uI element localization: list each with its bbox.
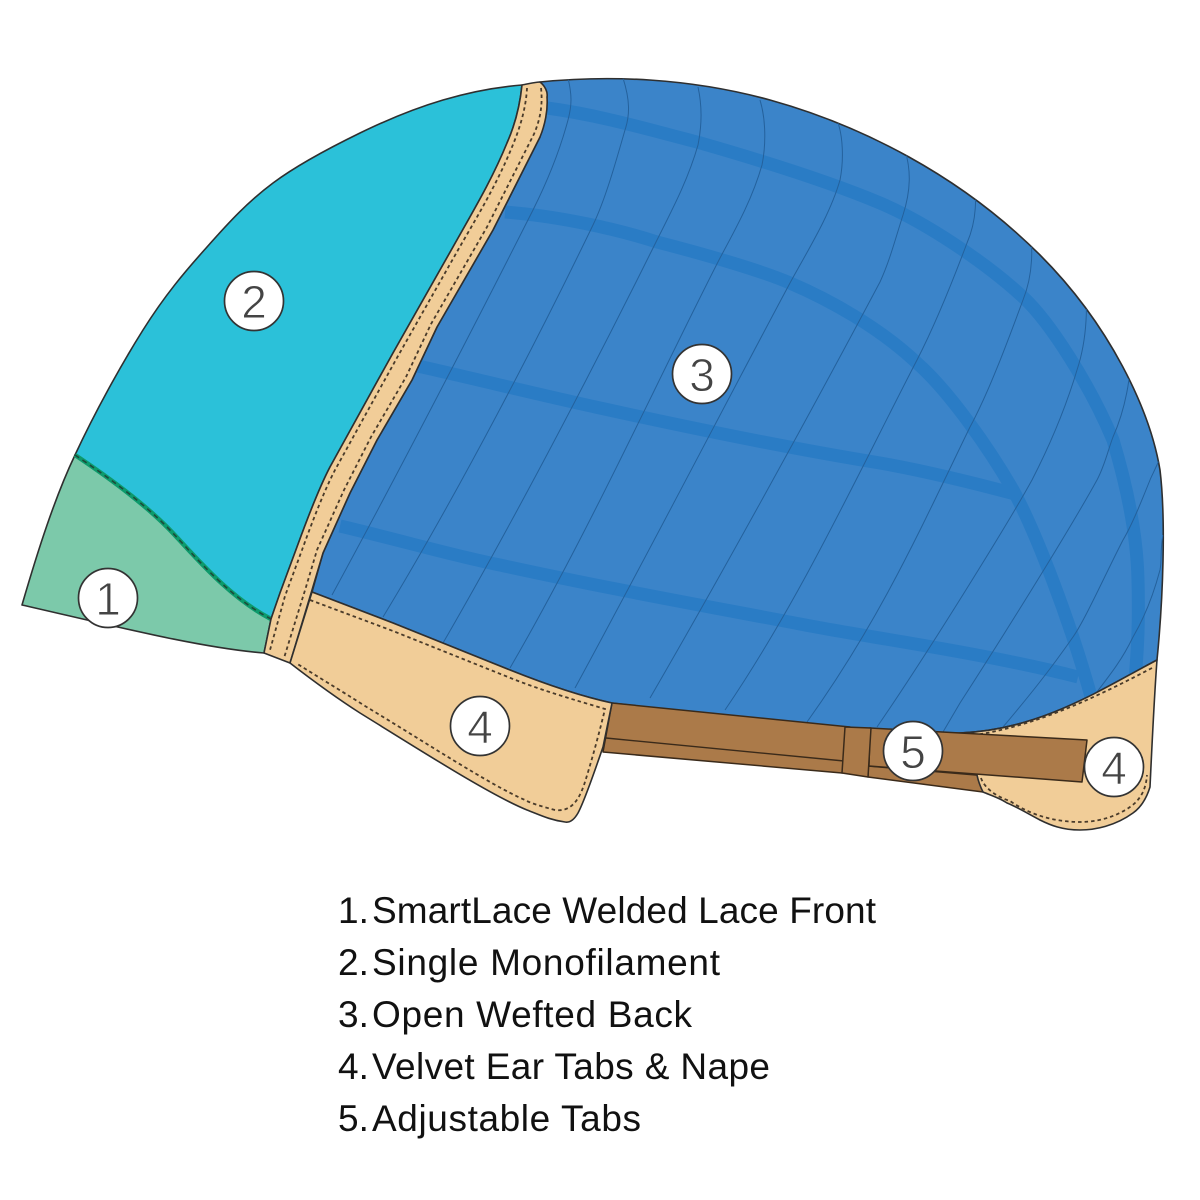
strap: adjustable tabs [603,703,1000,792]
number badge 4 left [450,696,510,756]
legend item 1: 1. [338,890,369,931]
number badge 3 [672,344,732,404]
number badge 4 left: 4 [467,701,493,753]
number badge 4 right [1084,738,1144,796]
seam between lace and monofilament [75,455,271,619]
legend item 3: 3. [338,994,369,1035]
number badge 2 [224,272,284,330]
strap: upper tab and buckle [842,727,1087,782]
number badge 1 [78,568,138,628]
legend item 5: 5. [338,1098,369,1139]
legend item 3: Open Wefted Back [372,994,692,1035]
legend item 2: 2. [338,942,369,983]
number badge 5 [884,722,942,780]
panel 1: lace front [22,455,271,653]
panel 2: single monofilament [75,85,522,619]
panel 3: open wefted back [312,78,1163,733]
legend item 4: 4. [338,1046,369,1087]
legend item 1: SmartLace Welded Lace Front [372,890,877,931]
panel 4: right nape tab [960,660,1157,830]
legend item 5: Adjustable Tabs [372,1098,641,1139]
number badge 1: 1 [95,573,121,625]
number badge 3: 3 [689,349,715,401]
tan seam band [264,82,547,663]
legend item 4: Velvet Ear Tabs & Nape [372,1046,770,1087]
legend list [338,890,877,1139]
panel 4: left ear tab [290,592,612,822]
diagram: wig cap side view [22,78,1163,830]
number badge 2: 2 [241,276,267,328]
legend item 2: Single Monofilament [372,942,721,983]
number badge 4 right: 4 [1101,742,1127,794]
number badge 5: 5 [900,726,926,778]
